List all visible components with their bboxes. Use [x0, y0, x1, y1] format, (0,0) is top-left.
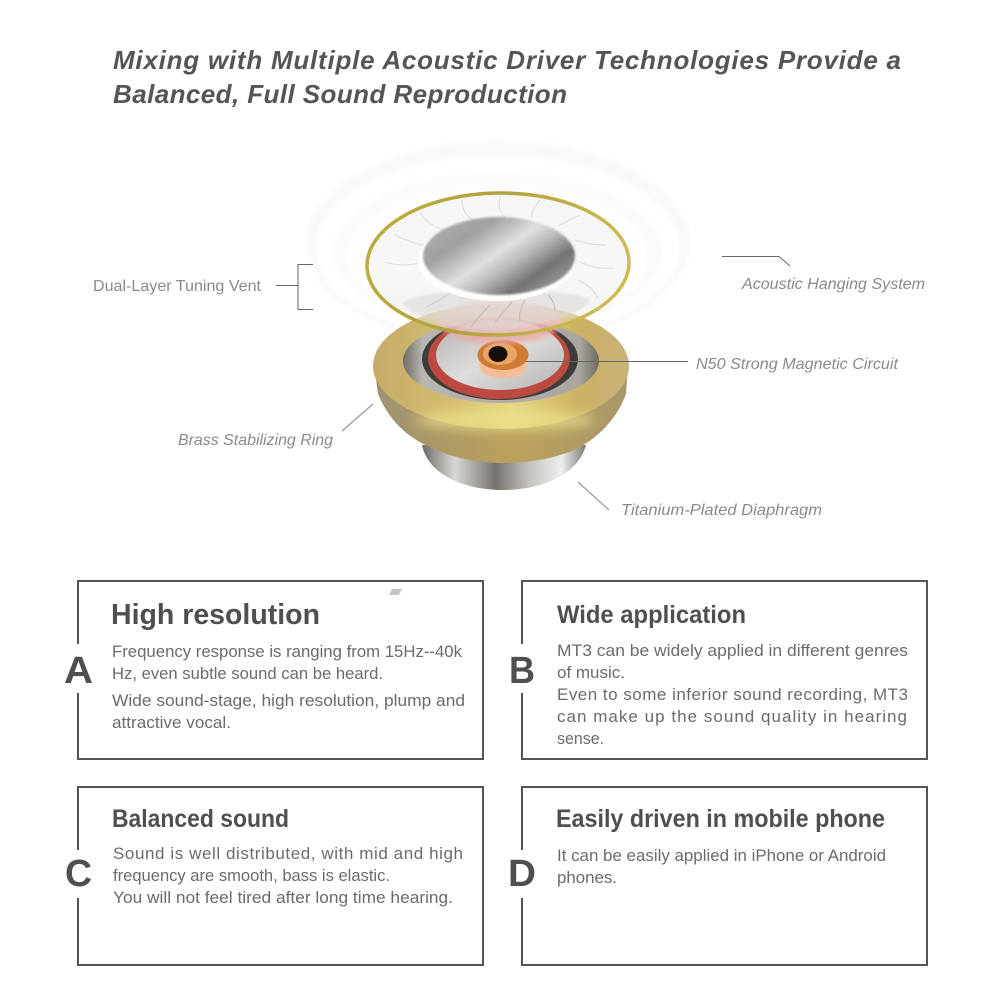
red voice coil [428, 317, 570, 399]
body B: can make up the sound quality in hearing [557, 707, 907, 726]
sound waves [306, 140, 690, 346]
lower surround shading [402, 290, 590, 330]
callout: N50 Strong Magnetic Circuit: N50 Strong Magnetic Circuit [696, 356, 899, 373]
badge C: C [65, 853, 92, 895]
ring opening [403, 319, 599, 403]
body A: attractive vocal. [112, 713, 231, 732]
body D: phones. [557, 868, 617, 887]
callout: Acoustic Hanging System: Acoustic Hanging System [741, 276, 925, 293]
body A: Hz, even subtle sound can be heard. [112, 664, 383, 683]
panel C: Balanced sound [65, 787, 483, 965]
panel D: Easily driven in mobile phone [508, 787, 927, 965]
heading D: Easily driven in mobile phone [556, 805, 885, 833]
body B: MT3 can be widely applied in different genres [557, 641, 908, 660]
callout: Titanium-Plated Diaphragm [578, 482, 822, 519]
body B [557, 641, 908, 748]
copper ring hole [488, 346, 508, 362]
body C: frequency are smooth, bass is elastic. [113, 866, 390, 885]
brass ring side [374, 365, 628, 463]
callout: Dual-Layer Tuning Vent: Dual-Layer Tuning Vent [93, 278, 262, 295]
callout: Dual-Layer Tuning Vent [93, 264, 313, 310]
title: Balanced, Full Sound Reproduction [113, 79, 567, 109]
body D [557, 846, 886, 887]
bottom titanium cylinder [422, 445, 586, 490]
body A: Frequency response is ranging from 15Hz--40k [112, 642, 462, 661]
badge D: D [508, 853, 536, 895]
callout: Brass Stabilizing Ring: Brass Stabilizing Ring [178, 432, 333, 449]
heading A: High resolution [111, 599, 320, 631]
body B: sense. [557, 729, 604, 748]
callout: Acoustic Hanging System [722, 256, 925, 293]
body B: of music. [557, 663, 625, 682]
diaphragm rim [366, 191, 630, 337]
body C [113, 844, 463, 907]
translucent surround lower [438, 300, 562, 344]
silver magnet [436, 320, 564, 390]
brass ring [373, 303, 629, 429]
title [113, 45, 901, 109]
titanium dome [423, 217, 575, 295]
body C: Sound is well distributed, with mid and high [113, 844, 463, 863]
copper ring glow [479, 354, 527, 378]
brass highlight [415, 410, 595, 430]
heading B: Wide application [557, 601, 746, 629]
body C: You will not feel tired after long time hearing. [113, 888, 453, 907]
callout: Brass Stabilizing Ring [178, 404, 373, 449]
diagram: exploded driver [306, 140, 690, 490]
title: Mixing with Multiple Acoustic Driver Technologies Provide a [113, 45, 901, 75]
panel B: Wide application [509, 581, 927, 759]
copper ring [478, 340, 528, 370]
callout: Titanium-Plated Diaphragm: Titanium-Plated Diaphragm [621, 502, 822, 519]
heading C: Balanced sound [112, 805, 289, 833]
badge A: A [64, 650, 93, 692]
badge B: B [509, 650, 535, 692]
diaphragm ribs [385, 197, 615, 328]
body D: It can be easily applied in iPhone or Android [557, 846, 886, 865]
diaphragm membrane [366, 191, 630, 337]
body B: Even to some inferior sound recording, MT3 [557, 685, 908, 704]
panel A: High resolution [64, 581, 483, 759]
body A [112, 642, 465, 732]
dome highlight crescent [418, 219, 576, 301]
stray mark [389, 589, 402, 595]
body A: Wide sound-stage, high resolution, plump and [112, 691, 465, 710]
